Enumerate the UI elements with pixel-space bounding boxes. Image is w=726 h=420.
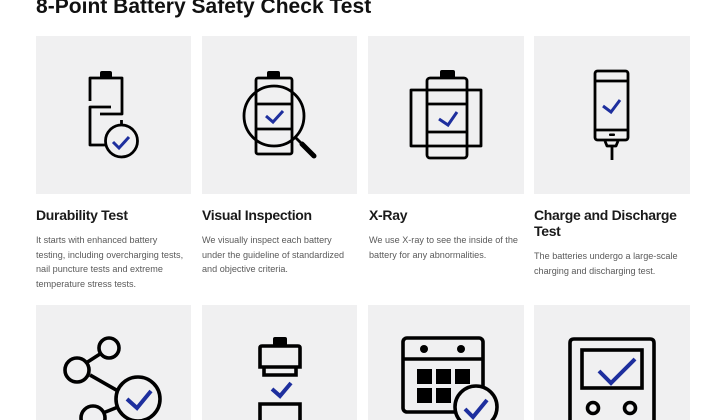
text: x-ray: We use X-ray to see the inside of the	[369, 235, 518, 245]
text: durability test: Durability Test	[36, 207, 128, 223]
text: durability test: testing, including overcharging tests,	[36, 250, 183, 260]
icon: calendar with check	[401, 336, 499, 420]
icon: split battery with check	[88, 71, 139, 158]
text: visual inspection: and objective criteria.	[202, 264, 288, 274]
text: x-ray: battery for any abnormalities.	[369, 250, 486, 260]
panel: calendar test icon	[368, 305, 524, 420]
icon: phone charging	[594, 70, 630, 160]
icon: battery under magnifier	[242, 71, 316, 158]
text: charge and discharge test: The batteries undergo a large-scale	[534, 251, 678, 261]
text: durability test: It starts with enhanced battery	[36, 235, 157, 245]
icon: battery with x-ray frame	[410, 70, 482, 160]
panel: durability test icon	[36, 36, 191, 194]
icon: tester device with check	[568, 337, 656, 420]
text: durability test: temperature stress tests.	[36, 278, 136, 288]
text: x-ray	[369, 207, 518, 260]
icon: connected nodes with check	[63, 336, 162, 420]
panel: network test icon	[36, 305, 191, 420]
text: durability test	[36, 207, 183, 289]
text: visual inspection	[202, 207, 344, 274]
panel: visual inspection icon	[202, 36, 357, 194]
panel: charge and discharge icon	[534, 36, 690, 194]
panel: x-ray icon	[368, 36, 524, 194]
icon: separated battery with check	[258, 337, 302, 420]
text: x-ray: X-Ray	[369, 207, 407, 223]
text: visual inspection: We visually inspect each battery	[202, 235, 332, 245]
text: charge and discharge test	[534, 207, 678, 276]
panel: device test icon	[534, 305, 690, 420]
text: visual inspection: Visual Inspection	[202, 207, 312, 223]
text: charge and discharge test: Charge and Discharge	[534, 207, 677, 223]
text: charge and discharge test: charging and discharging test.	[534, 266, 655, 276]
text: charge and discharge test: Test	[534, 223, 561, 239]
text: visual inspection: under the guideline of standardized	[202, 250, 344, 260]
panel: assembly test icon	[202, 305, 357, 420]
text: durability test: nail puncture tests and extreme	[36, 264, 163, 274]
